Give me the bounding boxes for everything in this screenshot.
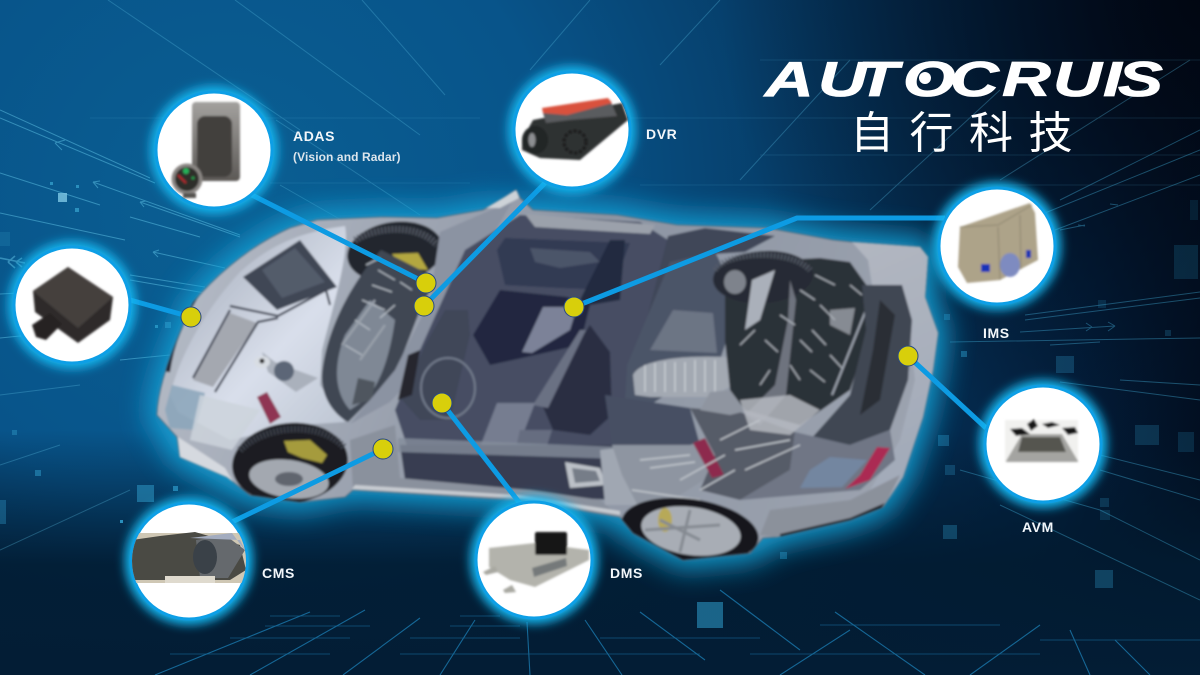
engine fine detail (740, 275, 874, 395)
roof rail (525, 214, 655, 234)
lower seat cushion (482, 402, 535, 444)
battery tray (243, 240, 337, 310)
right data rays with arrows (950, 130, 1200, 600)
rear side scoop (565, 462, 606, 488)
spoiler (852, 241, 939, 498)
background perspective grid lines (90, 0, 1200, 225)
dot: AVM (898, 346, 918, 366)
logo wordmark: AUTOCRUIS (763, 52, 1163, 107)
front bumper lower lip (178, 437, 235, 485)
engine lid translucent arc (810, 285, 912, 445)
engine light parts (745, 270, 775, 330)
cockpit floor (394, 214, 668, 446)
car cyan halo (157, 210, 938, 560)
front bumper section (190, 395, 260, 450)
rear slate floor panel (605, 395, 700, 445)
icon: IMS camera (958, 203, 1038, 283)
line: CMS (232, 449, 383, 522)
radiator panel (193, 313, 257, 387)
bottom perspective floor grid (155, 590, 1200, 675)
line: DVR (424, 183, 545, 306)
rear wheel top (712, 250, 812, 296)
node: DVR (508, 66, 636, 194)
rear bumper section (740, 430, 895, 500)
dashboard (402, 310, 470, 420)
left headlamp (165, 385, 205, 430)
upper seat back (473, 290, 590, 365)
line: IMS (574, 218, 945, 307)
rear red shock (693, 438, 724, 478)
rear cabin panel (628, 253, 727, 404)
hood panel (170, 226, 346, 440)
wing mirror (482, 190, 519, 208)
rear window (650, 227, 774, 308)
dot: IMS (564, 297, 584, 317)
label: CMS: CMS (262, 565, 295, 581)
label: vision and radar: (Vision and Radar) (293, 150, 401, 164)
upper front wheel (346, 220, 440, 277)
line: DMS (442, 403, 522, 506)
label: DMS: DMS (610, 565, 643, 581)
steering wheel (421, 358, 475, 418)
front wheel (228, 417, 352, 509)
firewall and engine bay strip (322, 250, 436, 422)
lower rear bumper (760, 475, 900, 537)
dot: radar module (181, 307, 201, 327)
rear wheel (617, 490, 763, 570)
node: CMS (125, 497, 253, 625)
icon: DMS control unit (483, 532, 589, 593)
muffler (633, 357, 733, 397)
node: DMS (470, 496, 598, 624)
radiator hoses (193, 290, 330, 392)
logo Chinese name: 自行科技 (850, 109, 1088, 158)
dot: DVR (414, 296, 434, 316)
label: AVM: AVM (1022, 519, 1054, 535)
icon: ADAS camera radar housing (172, 102, 240, 198)
icon: radar box (32, 267, 113, 343)
node: IMS (933, 182, 1061, 310)
icon: CMS cockpit photo (132, 532, 246, 583)
left data rays with arrows (0, 110, 240, 550)
dot: CMS (373, 439, 393, 459)
icon: dashcam (522, 98, 628, 160)
upper seat bolster (580, 240, 625, 305)
door panel (497, 238, 630, 290)
icon: AVM cameras and board (1005, 419, 1078, 462)
line: radar module (130, 300, 191, 317)
node: ADAS (150, 86, 278, 214)
node: radar module (8, 241, 136, 369)
connector lines (130, 183, 986, 522)
upper seat cushion (522, 307, 577, 353)
hood front window edge (164, 298, 198, 374)
A-pillar (353, 204, 509, 422)
suspension detail (632, 420, 800, 500)
car body shell (157, 190, 938, 560)
label: IMS: IMS (983, 325, 1010, 341)
engine bay details (342, 258, 412, 360)
line: ADAS (252, 195, 426, 283)
engine compartment (725, 258, 870, 425)
rear lower body (611, 443, 705, 504)
label: DVR: DVR (646, 126, 677, 142)
node: AVM (979, 380, 1107, 508)
interior and mechanical layers (165, 190, 938, 570)
logo O center dot (919, 72, 931, 84)
connection dots (181, 273, 918, 459)
dot: ADAS (416, 273, 436, 293)
logo (763, 52, 1163, 158)
rear mechanical area (690, 408, 795, 500)
front red shock (257, 392, 281, 424)
lower cabin and translucent door bar (400, 444, 610, 500)
label: ADAS: ADAS (293, 128, 335, 144)
front strut (262, 352, 318, 392)
tail light (845, 447, 890, 489)
car cutaway illustration (157, 190, 938, 570)
line: AVM (908, 356, 986, 428)
lower seat back (540, 325, 612, 435)
dot: DMS (432, 393, 452, 413)
floating data squares (0, 182, 1198, 628)
door lower skin (350, 426, 606, 508)
